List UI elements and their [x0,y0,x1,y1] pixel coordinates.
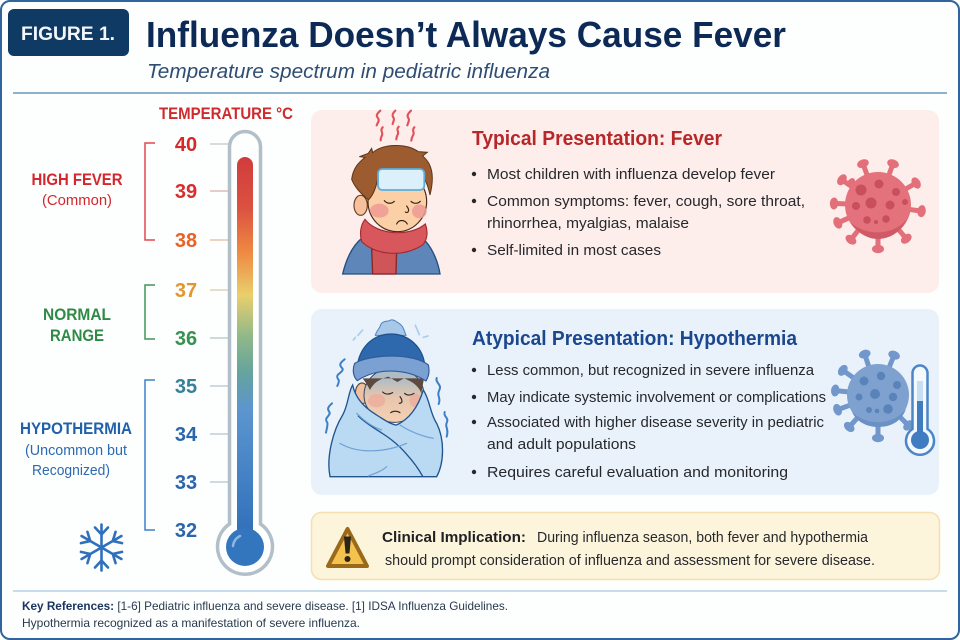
head [364,368,424,422]
panel: atypical presentation [311,309,939,495]
icon: blue virus [830,348,916,442]
bullet list: Requires careful evaluation and monitoring [487,464,788,481]
ear [355,383,369,404]
hat band [353,356,429,381]
scale numbers: 37 [175,280,197,302]
hat crown [357,334,425,367]
scale numbers: 33 [175,472,197,494]
range: hypothermia: Recognized) [32,462,110,479]
bullet list [472,166,805,259]
scale numbers: 35 [175,376,197,398]
scale numbers: 36 [175,328,197,350]
bullet list: Common symptoms: fever, cough, sore throat, [487,193,805,210]
hair [352,146,432,200]
figure badge: FIGURE 1. [21,24,115,45]
cold compress [378,169,424,190]
icon: feverish child [343,111,440,274]
bullet list: and adult populations [487,436,636,453]
title: Influenza Doesn’t Always Cause Fever [146,14,786,55]
tick marks [210,144,229,482]
heading: Atypical Presentation: Hypothermia [472,328,798,350]
range: normal: NORMAL [43,305,111,324]
blanket folds [340,413,433,476]
axis heading: TEMPERATURE °C [159,105,293,123]
ear [354,195,367,215]
subtitle: Temperature spectrum in pediatric influenza [147,61,550,83]
bullet list [472,362,826,481]
range: hypothermia: (Uncommon but [25,442,128,459]
references [22,599,508,630]
range: high fever [32,143,155,240]
range: hypothermia [20,380,155,530]
scale numbers: 34 [175,424,198,446]
icon: warning triangle [328,529,367,566]
face [383,392,414,413]
pom pom [375,320,406,335]
hair [363,377,424,393]
blanket [329,385,443,477]
references: Key References: [1-6] Pediatric influenza and severe disease. [1] IDSA Influenza Guidelines. [22,599,508,613]
scarf tail [372,249,397,274]
scale numbers: 32 [175,520,197,542]
bullet list: Associated with higher disease severity in pediatric [487,414,824,431]
icon: shivering child [326,320,447,477]
scale numbers: 40 [175,134,197,156]
bullet list: Less common, but recognized in severe influenza [487,362,815,379]
thermometer [217,132,272,574]
range: normal: RANGE [50,326,104,345]
jacket [343,238,440,274]
icon: small thermometer [906,366,934,455]
bullet list: Most children with influenza develop fever [487,166,775,183]
panel: clinical implication: should prompt consideration of influenza and assessment for severe disease. [385,552,875,569]
shiver lines [326,359,447,437]
range: high fever: (Common) [42,192,112,209]
scale numbers [175,134,198,542]
range: normal [43,285,155,345]
frost marks [353,325,428,340]
heat waves [377,111,414,141]
references: Hypothermia recognized as a manifestation of severe influenza. [22,616,360,630]
icon: red virus [830,158,927,253]
implication text: Clinical Implication: [382,529,526,546]
panel: clinical implication: During influenza season, both fever and hypothermia [537,529,869,546]
panel: typical presentation [311,110,939,293]
thermometer scale [175,134,229,542]
bullet list: May indicate systemic involvement or complications [487,389,826,406]
range: high fever: HIGH FEVER [32,171,123,189]
panel: clinical implication [312,512,940,580]
bullet list: rhinorrhea, myalgias, malaise [487,215,689,232]
face [384,201,420,224]
bullet list: Self-limited in most cases [487,242,661,259]
scale numbers: 38 [175,230,197,252]
figure badge [8,9,129,56]
heading: Typical Presentation: Fever [472,128,722,150]
head [368,172,427,232]
icon: snowflake [78,524,125,570]
scarf [361,219,427,253]
scale numbers: 39 [175,181,197,203]
range: hypothermia: HYPOTHERMIA [20,420,132,438]
